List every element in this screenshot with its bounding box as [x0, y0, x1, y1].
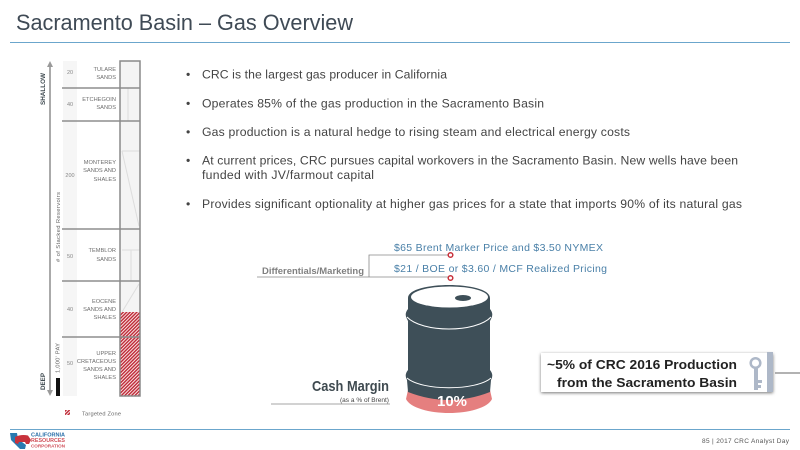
formation labels: EOCENE: [92, 299, 116, 305]
formation labels: MONTEREY: [84, 160, 116, 166]
footer page label: 85 | 2017 CRC Analyst Day: [702, 438, 790, 445]
pay label: 1,000' PAY: [56, 343, 62, 373]
thickness values: [65, 70, 75, 367]
logo: California Resources Corporation: CALIFORNIA: [31, 432, 65, 438]
icon: barrel: [406, 285, 492, 413]
logo: California Resources Corporation: RESOURCES: [31, 438, 65, 444]
formation labels: ETCHEGOIN: [82, 97, 116, 103]
shallow label: SHALLOW: [40, 72, 47, 105]
bullet: capital workovers: At current prices, CRC pursues capital workovers in the Sacramento Basin. New wells have been: [202, 154, 738, 168]
stratigraphic column chart: [40, 61, 140, 396]
stacked reservoirs axis label: # of Stacked Reservoirs: [56, 192, 62, 262]
thickness values: 20: [67, 70, 73, 76]
legend: targeted zone: [65, 410, 121, 418]
callout: production share: from the Sacramento Basin: [557, 375, 737, 390]
formation labels: SHALES: [94, 177, 116, 183]
price labels: $65 Brent Marker Price and $3.50 NYMEX: [394, 242, 603, 254]
formation labels: SHALES: [94, 375, 116, 381]
bullet: optionality: •: [186, 197, 190, 211]
bullet: optionality: Provides significant optionality at higher gas prices for a state that imports 90% of its natural gas: [202, 197, 742, 211]
formation labels: SANDS: [96, 257, 116, 263]
bullet: largest producer: CRC is the largest gas producer in California: [202, 68, 447, 82]
bullet: capital workovers: •: [186, 154, 190, 168]
logo: California Resources Corporation: CORPORATION: [31, 444, 66, 450]
bullet list: [186, 68, 742, 211]
deep label: DEEP: [40, 372, 47, 390]
thickness values: 200: [65, 173, 75, 179]
formation labels: SHALES: [94, 315, 116, 321]
price labels: [394, 242, 607, 275]
bullet: capital workovers: [186, 154, 738, 182]
icon: barrel: 10%: [437, 393, 467, 410]
callout: production share: ~5% of CRC 2016 Production: [547, 357, 737, 372]
formation labels: UPPER: [96, 351, 116, 357]
bullet: operated share: •: [186, 96, 190, 110]
formation labels: CRETACEOUS: [77, 359, 116, 365]
formation labels: SANDS AND: [83, 168, 116, 174]
thickness values: 40: [67, 102, 73, 108]
price labels: $21 / BOE or $3.60 / MCF Realized Pricing: [394, 263, 607, 275]
icon: key: [751, 358, 762, 390]
bullet: largest producer: •: [186, 68, 190, 82]
formation labels: SANDS AND: [83, 307, 116, 313]
thickness values: 50: [67, 254, 73, 260]
cash margin label: [271, 378, 390, 404]
formation labels: TEMBLOR: [88, 248, 116, 254]
cash margin label: Cash Margin: [312, 378, 389, 395]
logo: California Resources Corporation: [10, 432, 66, 450]
formation labels: SANDS: [96, 75, 116, 81]
bullet: capital workovers: funded with JV/farmout capital: [202, 168, 374, 182]
depth arrow: [47, 61, 53, 396]
callout: production share: [541, 352, 800, 392]
formation labels: TULARE: [94, 67, 116, 73]
formation labels: SANDS AND: [83, 367, 116, 373]
bullet: operated share: Operates 85% of the gas production in the Sacramento Basin: [202, 96, 544, 110]
title: Sacramento Basin – Gas Overview: [16, 10, 353, 35]
bullet: natural hedge: •: [186, 125, 190, 139]
formation labels: [77, 67, 116, 381]
thickness values: 40: [67, 307, 73, 313]
cash margin label: (as a % of Brent): [340, 397, 389, 404]
legend: targeted zone: Targeted Zone: [82, 412, 121, 418]
targeted zone hatch: [120, 312, 140, 396]
bullet: natural hedge: Gas production is a natural hedge to rising steam and electrical energy costs: [202, 125, 630, 139]
formation labels: SANDS: [96, 105, 116, 111]
1,000 ft pay bar: [56, 378, 60, 396]
differentials bracket: [257, 253, 453, 280]
thickness values: 50: [67, 361, 73, 367]
differentials bracket: Differentials/Marketing: [262, 266, 364, 277]
